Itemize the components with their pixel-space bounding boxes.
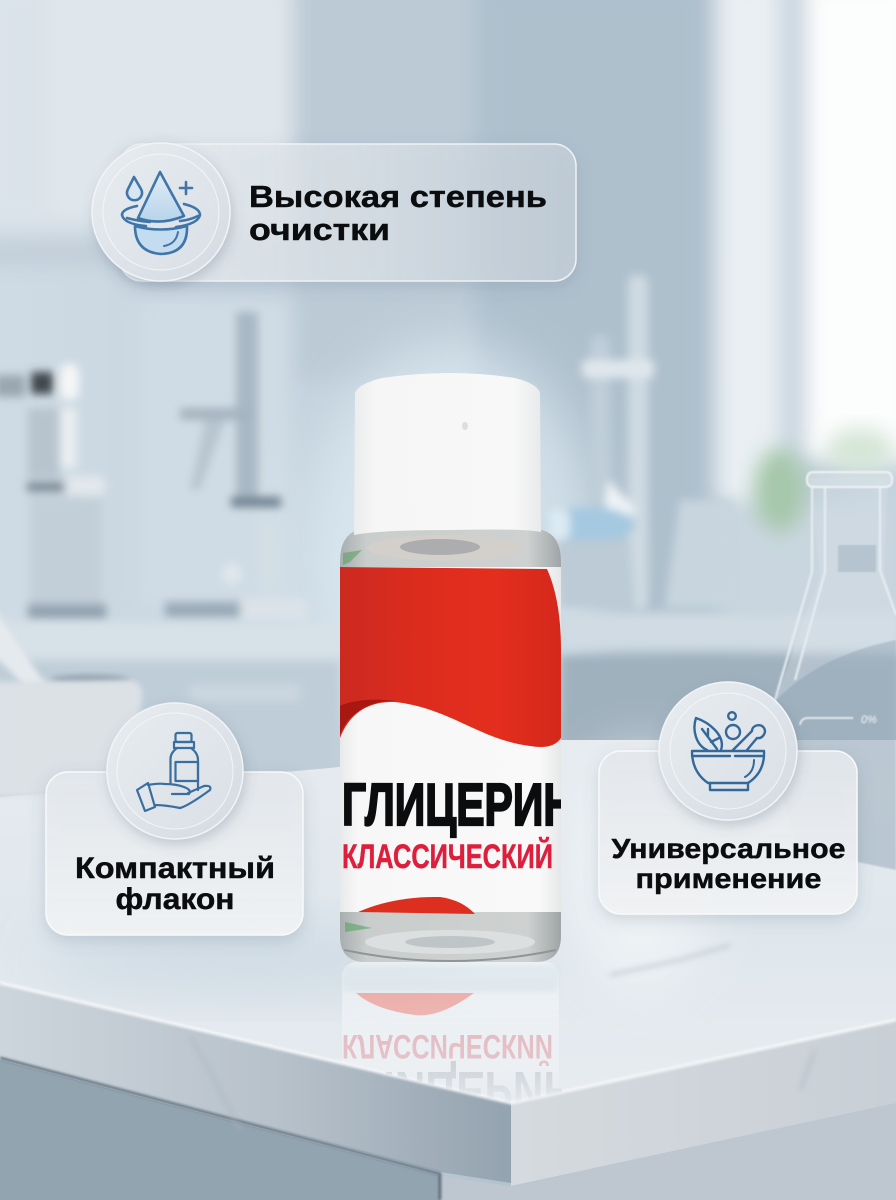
lower cabinet: [0, 1060, 440, 1200]
heading: universal use: применение: [636, 863, 822, 894]
marble counter: [0, 740, 896, 1200]
heading: high purity: Высокая степень: [249, 179, 547, 214]
product name: ГЛИЦЕРИН: [342, 772, 574, 838]
bottle glass body: [340, 530, 561, 962]
icon: purified water drop: [92, 143, 230, 281]
bottle reflection: КЛАССИЧЕСКИЙ: [342, 1027, 553, 1066]
mortar in the background: [0, 610, 142, 797]
heading: high purity: [249, 179, 547, 247]
panel: high purity: [92, 143, 576, 281]
icon: mortar with herbs: [659, 682, 797, 820]
icon: bottle on hand: [107, 703, 243, 839]
panel: universal use: [599, 682, 857, 914]
heading: high purity: очистки: [249, 212, 390, 247]
heading: universal use: Универсальное: [612, 833, 846, 864]
bottle reflection: [342, 962, 562, 1098]
bottle: [340, 373, 574, 962]
product variant: КЛАССИЧЕСКИЙ: [342, 837, 553, 876]
glass flask: [775, 472, 896, 870]
heading: compact bottle: флакон: [116, 883, 234, 916]
bottle cap: [354, 373, 541, 535]
flask graduation mark: 0%: [861, 714, 877, 726]
panel: compact bottle: [46, 703, 303, 935]
heading: compact bottle: Компактный: [75, 852, 275, 885]
counter right face: [511, 1020, 896, 1186]
counter left face: [0, 983, 511, 1183]
heading: compact bottle: [75, 852, 275, 916]
bottle reflection: ГЛИЦЕРИН: [342, 1060, 574, 1123]
heading: universal use: [612, 833, 846, 894]
bottle label: [340, 567, 574, 914]
